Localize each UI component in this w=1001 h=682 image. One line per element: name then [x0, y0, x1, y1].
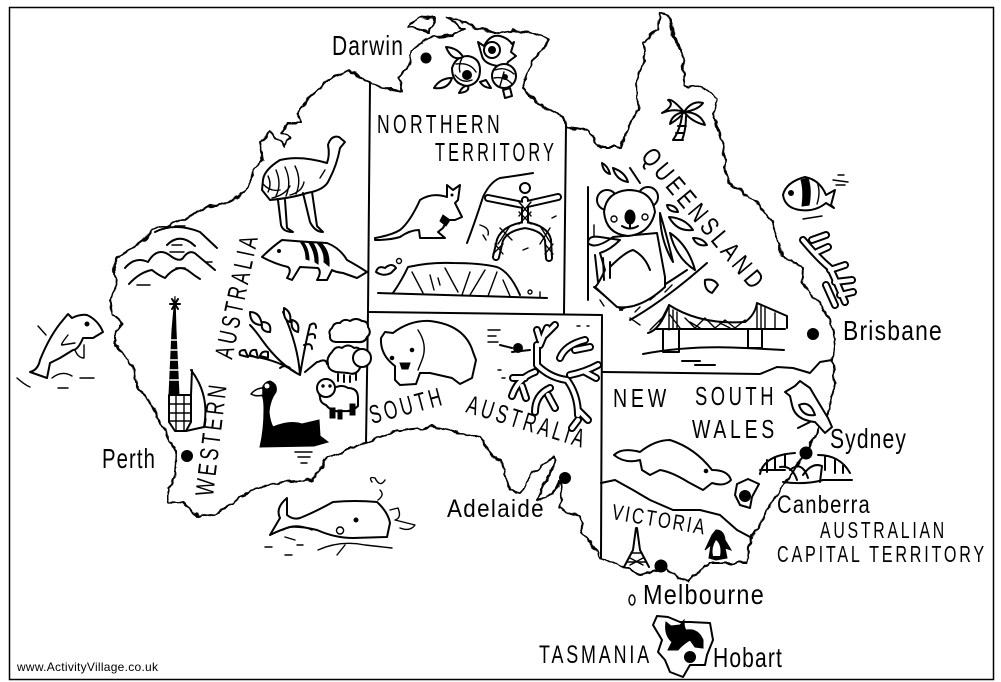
- labels: cities: Darwin: [332, 30, 404, 61]
- credit text: www.ActivityVillage.co.uk: [16, 660, 159, 674]
- icon: flowers: [434, 36, 516, 98]
- labels: cities: Hobart: [713, 642, 783, 673]
- labels: states: SOUTH: [366, 381, 448, 430]
- labels: states: AUSTRALIA: [463, 389, 592, 454]
- labels: states: NEW: [613, 383, 670, 413]
- icon: Sydney Harbour Bridge and Opera House: [760, 453, 852, 483]
- city dots: [182, 53, 818, 662]
- icon: Tasmanian devil: [666, 620, 703, 650]
- labels: states: WESTERN: [189, 380, 233, 498]
- icon: kangaroo: [375, 185, 462, 240]
- icon: clownfish: [783, 175, 848, 219]
- labels: cities: Canberra: [777, 491, 871, 519]
- icon: leafy seadragon: [488, 325, 598, 428]
- labels: cities: Perth: [102, 443, 156, 474]
- icon: hills: [125, 226, 217, 285]
- icon: plant: [240, 308, 327, 375]
- icon: small island: [629, 595, 635, 605]
- labels: states: AUSTRALIA: [209, 230, 264, 361]
- labels: states: SOUTH: [695, 381, 777, 411]
- labels: states: NORTHERN: [377, 109, 503, 139]
- labels: states: VICTORIA: [610, 499, 709, 540]
- icon: whale: [265, 478, 415, 555]
- icon: black swan: [251, 381, 328, 463]
- labels: states: WALES: [692, 414, 778, 444]
- labels: states: TASMANIA: [539, 641, 652, 669]
- icon: numbat: [262, 240, 367, 280]
- icon: Victoria tower: [624, 528, 649, 567]
- labels: cities: Sydney: [830, 423, 907, 454]
- icon: coral: [803, 235, 853, 305]
- coastline of Australia: [110, 13, 835, 582]
- icon: dolphin: [17, 314, 103, 388]
- icon: palm tree: [662, 100, 705, 140]
- icon: penguin: [705, 530, 731, 560]
- labels: cities: Adelaide: [447, 495, 545, 523]
- icon: emu: [262, 137, 345, 232]
- labels: cities: Brisbane: [843, 315, 943, 346]
- state borders: [366, 83, 832, 558]
- icon: sheep: [317, 319, 371, 419]
- icon: Uluru: [376, 258, 547, 298]
- icon: Story Bridge: [643, 303, 787, 365]
- icon: platypus: [614, 440, 731, 490]
- labels: cities: [102, 30, 943, 673]
- icon: wombat: [381, 321, 476, 385]
- labels: states: TERRITORY: [435, 137, 557, 167]
- icon: Canberra area: [735, 479, 759, 508]
- icon: kookaburra: [785, 381, 832, 433]
- labels: states: AUSTRALIAN: [820, 517, 947, 543]
- labels: cities: Melbourne: [643, 579, 765, 610]
- icon: koala and branch: [588, 163, 718, 325]
- icon: aboriginal figure: [467, 173, 558, 258]
- icon: spire tower: [169, 296, 205, 431]
- labels: states: QUEENSLAND: [635, 142, 773, 297]
- labels: states: [189, 109, 987, 669]
- icon: Tasmania outline: [653, 616, 713, 677]
